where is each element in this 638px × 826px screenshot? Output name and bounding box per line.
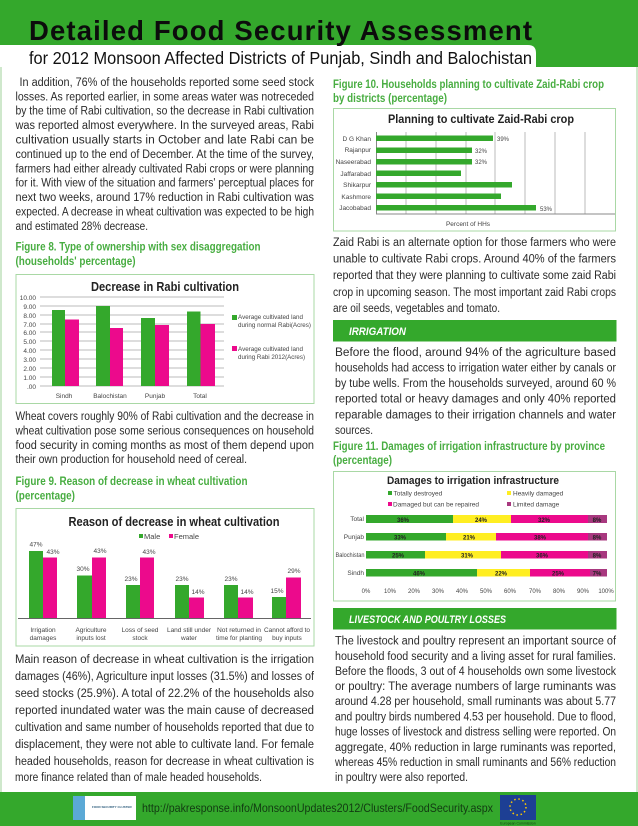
bar chart: reason of decrease in wheat cultivation: 43% [142, 549, 156, 556]
bar chart: reason of decrease in wheat cultivation: 47% [29, 542, 43, 548]
x axis labels: 90% [577, 589, 590, 595]
row: Punjab: Punjab [344, 534, 364, 541]
x axis labels: 70% [529, 589, 542, 595]
text block: seed stock and Rabi cultivation: In addition, 76% of the households reported some seed stock [20, 77, 314, 89]
bar chart: decrease in Rabi cultivation: Average cultivated land [238, 346, 303, 353]
row: Total: 32% [538, 518, 551, 524]
section band: irrigation [333, 320, 616, 342]
bar chart: reason of decrease in wheat cultivation: 23% [175, 576, 189, 583]
bar chart: reason of decrease in wheat cultivation: Male [144, 532, 160, 541]
text block: main reason of decrease: damages (46%), Agriculture input losses (31.5%) and losses of [15, 671, 315, 683]
text block: irrigation: households had access to irrigation water either by canals or [335, 363, 616, 375]
row: Balochistan [336, 551, 607, 560]
heading: figure 9: (percentage) [16, 490, 75, 502]
bar chart: decrease in Rabi cultivation: 6.00 [23, 330, 36, 337]
text block: livestock: The livestock and poultry represent an important source of [335, 636, 617, 648]
text block: seed stock and Rabi cultivation: expected. A decrease in wheat cultivation was expected to be high [16, 206, 314, 218]
text block: main reason of decrease: more finance related than of male headed households. [15, 772, 262, 784]
bar chart: reason of decrease in wheat cultivation: 14% [191, 589, 205, 596]
heading: figure 10 [333, 79, 604, 105]
text block: main reason of decrease: displacement, they were not able to cultivate land. For female [15, 739, 314, 751]
bar chart: planning to cultivate Zaid-Rabi crop: Jaffarabad [340, 171, 371, 178]
logo: food security cluster [73, 796, 136, 820]
stacked bar chart: damages to irrigation infrastructure: Limited damage [513, 502, 560, 508]
bar chart: reason of decrease in wheat cultivation: inputs lost [76, 635, 106, 642]
text block: main reason of decrease: cultivation and same number of households reported that due to [15, 722, 314, 734]
logo: food security cluster: FOOD SECURITY CLUSTER [92, 805, 132, 809]
text block: irrigation: by tube wells. From the households surveyed, around 60 % [335, 378, 616, 390]
text block: Zaid Rabi: are oil seeds, vegetables and tomato. [333, 303, 500, 315]
bar chart: reason of decrease in wheat cultivation: water [180, 635, 198, 642]
bar chart: reason of decrease in wheat cultivation: damages [30, 635, 57, 642]
title: Detailed Food Security Assessment [29, 15, 532, 46]
heading: figure 11 [333, 441, 605, 467]
row: Punjab [344, 533, 607, 542]
text block: wheat coverage: food security in coming months as most of them depend upon [16, 440, 314, 452]
bar chart: planning to cultivate Zaid-Rabi crop: Kashmore [341, 194, 371, 201]
heading: figure 10: by districts (percentage) [333, 93, 447, 105]
text block: livestock: around 4.28 per household, small ruminants was about 5.77 [335, 696, 616, 708]
row: Sindh: 7% [593, 572, 602, 578]
text block: irrigation: reparable damages to their irrigation channels and water [335, 409, 616, 421]
row: Balochistan: Balochistan [336, 552, 365, 559]
stacked bar chart: damages to irrigation infrastructure: Totally destroyed [394, 490, 443, 498]
stacked bar chart: damages to irrigation infrastructure: Damages to irrigation infrastructure [387, 475, 559, 487]
heading: figure 8: Figure 8. Type of ownership with sex disaggregation [16, 242, 260, 254]
bar chart: decrease in Rabi cultivation: Total [193, 393, 207, 400]
bar chart: planning to cultivate Zaid-Rabi crop: Jacobabad [339, 205, 371, 212]
x axis labels: 0% [362, 589, 371, 595]
heading: figure 9 [16, 476, 248, 502]
bar chart: decrease in Rabi cultivation: 4.00 [23, 348, 36, 355]
bar chart: reason of decrease in wheat cultivation: Irrigation [30, 627, 56, 634]
bar chart: reason of decrease in wheat cultivation: time for planting [216, 635, 262, 642]
header banner [0, 0, 638, 68]
bar chart: planning to cultivate Zaid-Rabi crop: 39% [497, 137, 510, 143]
text block: irrigation: sources. [335, 425, 373, 437]
text block: livestock [334, 636, 617, 784]
bar chart: reason of decrease in wheat cultivation: Reason of decrease in wheat cultivation [68, 515, 280, 529]
stacked bar chart: damages to irrigation infrastructure: Heavily damaged [513, 490, 564, 498]
text block: seed stock and Rabi cultivation [15, 77, 314, 233]
text block: Zaid Rabi: Zaid Rabi is an alternate option for those farmers who were [333, 237, 616, 249]
bar chart: reason of decrease in wheat cultivation [16, 508, 314, 646]
bar chart: reason of decrease in wheat cultivation: 30% [76, 566, 90, 573]
bar chart: decrease in Rabi cultivation: 1.00 [23, 375, 36, 382]
x axis labels [362, 589, 614, 595]
bar chart: reason of decrease in wheat cultivation: 29% [287, 568, 301, 575]
text block: irrigation: reported total or heavy damages and only 40% reported [335, 394, 616, 406]
row: Balochistan: 25% [392, 554, 405, 560]
x axis labels: 40% [456, 589, 469, 595]
text block: seed stock and Rabi cultivation: for it. With view of the situation and farmers' perceptual places for [16, 178, 314, 190]
bar chart: decrease in Rabi cultivation: 7.00 [23, 322, 36, 329]
bar chart: reason of decrease in wheat cultivation: Not returned in [217, 627, 261, 634]
bar chart: decrease in Rabi cultivation: 2.00 [23, 366, 36, 373]
text block: main reason of decrease: seed stocks (25.9%). A total of 22.2% of the households also [15, 688, 314, 700]
x axis labels: 80% [553, 589, 566, 595]
bar chart: planning to cultivate Zaid-Rabi crop: D G Khan [342, 136, 371, 143]
row: Balochistan: 31% [461, 554, 474, 560]
bar chart: decrease in Rabi cultivation: .00 [27, 384, 36, 391]
row: Total: Total [350, 516, 365, 523]
bar chart: planning to cultivate Zaid-Rabi crop: Naseerabad [336, 159, 371, 166]
text block: main reason of decrease: headed households, reason for decrease in wheat cultivation is [15, 756, 314, 768]
icon: EU flag [500, 795, 536, 826]
x axis labels: 20% [408, 589, 421, 595]
heading: figure 8: (households' percentage) [16, 256, 136, 268]
bar chart: planning to cultivate Zaid-Rabi crop [334, 108, 616, 231]
x axis labels: 50% [480, 589, 493, 595]
text block: livestock: or poultry: The average numbers of large ruminants was [335, 681, 616, 693]
bar chart: reason of decrease in wheat cultivation: Land still under [167, 627, 212, 634]
row: Balochistan: 36% [536, 554, 549, 560]
text block: main reason of decrease [15, 654, 315, 784]
bar chart: planning to cultivate Zaid-Rabi crop: Shikarpur [343, 182, 372, 189]
bar chart: decrease in Rabi cultivation: Decrease in Rabi cultivation [91, 280, 239, 294]
bar chart: reason of decrease in wheat cultivation: Loss of seed [122, 627, 159, 634]
text block: seed stock and Rabi cultivation: continued up to the end of December. At the time of the survey, [16, 149, 314, 161]
row: Total [350, 515, 607, 524]
section band: livestock and poultry losses [333, 608, 616, 630]
text block: main reason of decrease: Main reason of decrease in wheat cultivation is the irrigation [15, 654, 314, 666]
text block: seed stock and Rabi cultivation: losses. As reported earlier, in some areas water was notreceded [16, 91, 314, 103]
bar chart: planning to cultivate Zaid-Rabi crop: Planning to cultivate Zaid-Rabi crop [388, 114, 574, 126]
bar chart: decrease in Rabi cultivation: 10.00 [20, 295, 36, 302]
heading: figure 11: (percentage) [333, 455, 392, 467]
bar chart: planning to cultivate Zaid-Rabi crop: Rajanpur [345, 147, 372, 154]
bar chart: decrease in Rabi cultivation: 5.00 [23, 339, 36, 346]
bar chart: decrease in Rabi cultivation: 9.00 [23, 304, 36, 311]
text block: wheat coverage [15, 411, 314, 466]
heading: figure 9: Figure 9. Reason of decrease in wheat cultivation [16, 476, 248, 488]
x axis labels: 30% [432, 589, 445, 595]
bar chart: reason of decrease in wheat cultivation: 23% [224, 576, 238, 583]
text block: seed stock and Rabi cultivation: by the time of Rabi cultivation, so the decrease in Rabi cultivation [16, 106, 314, 118]
footer link: http://pakresponse.info/MonsoonUpdates2012/Clusters/FoodSecurity.aspx [142, 801, 493, 815]
row: Sindh: Sindh [347, 570, 364, 577]
text block: Zaid Rabi: unable to cultivate Rabi crops. Around 40% of the farmers [333, 254, 616, 266]
text block: seed stock and Rabi cultivation: next two weeks, around 17% reduction in Rabi cultivation was [16, 192, 314, 204]
text block: seed stock and Rabi cultivation: farmers had either already cultivated Rabi crops or were planning [16, 163, 314, 175]
bar chart: decrease in Rabi cultivation: Balochistan [93, 393, 127, 400]
bar chart: reason of decrease in wheat cultivation: stock [132, 635, 148, 642]
bar chart: decrease in Rabi cultivation: during Rabi 2012(Acres) [238, 354, 305, 361]
stacked bar chart: damages to irrigation infrastructure [334, 472, 616, 601]
bar chart: reason of decrease in wheat cultivation: 15% [270, 588, 284, 595]
text block: Zaid Rabi: reported that they were planning to cultivate some zaid Rabi [333, 270, 616, 282]
bar chart: reason of decrease in wheat cultivation: Cannot afford to [264, 627, 310, 634]
text block: main reason of decrease: reported inundated water was the main cause of decreased [15, 705, 314, 717]
text block: irrigation [335, 347, 616, 437]
x axis labels: 100% [598, 589, 614, 595]
footer band [0, 792, 638, 826]
row: Total: 8% [593, 518, 602, 524]
text block: seed stock and Rabi cultivation: was reported almost everywhere. In the surveyed areas, Rabi [15, 120, 314, 132]
row: Punjab: 21% [463, 536, 476, 542]
bar chart: reason of decrease in wheat cultivation: Female [174, 532, 199, 541]
bar chart: reason of decrease in wheat cultivation: 14% [240, 589, 254, 596]
x axis labels: 60% [504, 589, 517, 595]
icon: EU flag: European Commission [500, 822, 536, 826]
text block: irrigation: Before the flood, around 94% of the agriculture based [335, 347, 616, 359]
row: Punjab: 8% [593, 536, 602, 542]
row: Punjab: 33% [394, 536, 407, 542]
text block: livestock: Before the floods, 3 out of 4 households own some livestock [335, 666, 616, 678]
x axis labels: 10% [384, 589, 397, 595]
text block: livestock: household food security and a living asset for rural families. [335, 651, 616, 663]
text block: wheat coverage: wheat cultivation pose some serious consequences on household [15, 425, 314, 437]
text block: livestock: in poultry were also reported. [335, 772, 468, 784]
bar chart: decrease in Rabi cultivation: 3.00 [23, 357, 36, 364]
text block: wheat coverage: their own production for household need of cereal. [16, 454, 247, 466]
row: Total: 24% [475, 518, 488, 524]
row: Sindh [347, 569, 607, 578]
bar chart: reason of decrease in wheat cultivation: 23% [124, 576, 138, 583]
bar chart: planning to cultivate Zaid-Rabi crop: 32% [475, 160, 488, 166]
section band: irrigation: IRRIGATION [349, 326, 407, 338]
stacked bar chart: damages to irrigation infrastructure: Damaged but can be repaired [393, 502, 479, 508]
text block: Zaid Rabi [333, 237, 616, 315]
subtitle: for 2012 Monsoon Affected Districts of Punjab, Sindh and Balochistan [29, 48, 532, 68]
bar chart: decrease in Rabi cultivation: Sindh [56, 393, 73, 400]
text block: wheat coverage: Wheat covers roughly 90% of Rabi cultivation and the decrease in [16, 411, 314, 423]
bar chart: planning to cultivate Zaid-Rabi crop: 53% [540, 207, 553, 213]
bar chart: planning to cultivate Zaid-Rabi crop: 32% [475, 149, 488, 155]
row: Balochistan: 8% [593, 554, 602, 560]
row: Punjab: 38% [534, 536, 547, 542]
bar chart: decrease in Rabi cultivation: Punjab [145, 393, 165, 400]
section band: livestock and poultry losses: LIVESTOCK AND POULTRY LOSSES [349, 614, 507, 626]
bar chart: reason of decrease in wheat cultivation: 43% [46, 549, 60, 556]
bar chart: reason of decrease in wheat cultivation: buy inputs [272, 635, 303, 642]
bar chart: decrease in Rabi cultivation: during normal Rabi(Acres) [238, 322, 311, 329]
bar chart: reason of decrease in wheat cultivation: 43% [93, 548, 107, 555]
bar chart: planning to cultivate Zaid-Rabi crop: Percent of HHs [446, 221, 491, 228]
text block: livestock: aggregate, 40% reduction in large ruminants was reported, [335, 742, 616, 754]
bar chart: decrease in Rabi cultivation: Average cultivated land [238, 314, 303, 321]
row: Total: 36% [397, 518, 410, 524]
bar chart: decrease in Rabi cultivation [16, 274, 314, 404]
text block: seed stock and Rabi cultivation: and estimated 28% decrease. [16, 221, 148, 233]
row: Sindh: 25% [552, 572, 565, 578]
bar chart: reason of decrease in wheat cultivation: Agriculture [75, 627, 107, 634]
bar chart: decrease in Rabi cultivation: 8.00 [23, 313, 36, 320]
row: Sindh: 22% [495, 572, 508, 578]
text block: seed stock and Rabi cultivation: cultivation usually starts in October and late Rabi can be [16, 134, 314, 146]
heading: figure 8 [16, 242, 260, 268]
row: Sindh: 46% [413, 572, 426, 578]
